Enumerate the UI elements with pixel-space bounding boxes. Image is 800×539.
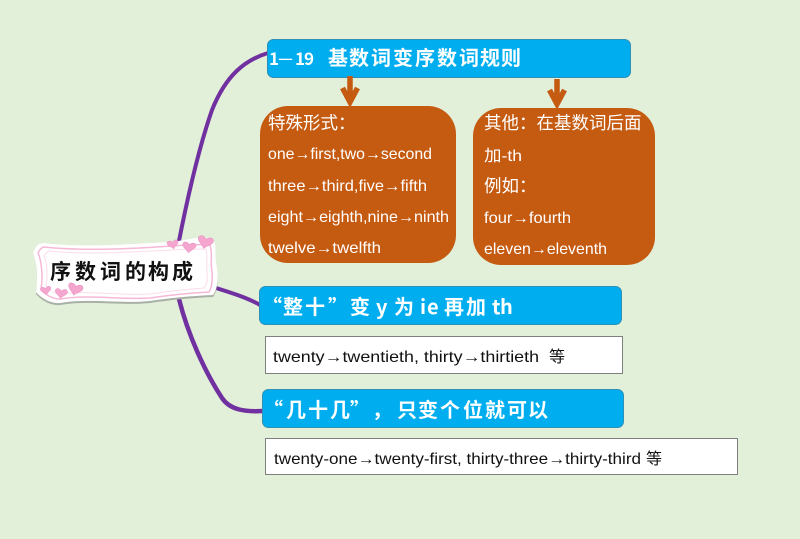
panel: other forms: 其他：在基数词后面 — [484, 110, 642, 135]
text box: compound examples — [266, 438, 738, 474]
heading: tens rule — [260, 286, 622, 324]
icon: hearts — [40, 235, 214, 299]
connector: center to tens rule — [216, 288, 260, 305]
panel: special forms: one→first,two→second — [268, 146, 432, 163]
heading: 1-19 rule: 1 — [269, 45, 279, 70]
panel: special forms — [260, 106, 456, 263]
text box: tens examples: twenty→twentieth, thirty→thirtieth — [273, 349, 539, 366]
panel: special forms: twelve→twelfth — [268, 240, 381, 257]
arrow: to special forms — [342, 76, 358, 102]
panel: special forms: three→third,five→fifth — [268, 178, 427, 195]
text box: tens examples — [266, 336, 622, 374]
panel: special forms: eight→eighth,nine→ninth — [268, 209, 449, 226]
panel: other forms: four→fourth — [484, 210, 571, 227]
text box: tens examples: 等 — [549, 348, 565, 366]
panel: other forms: 加-th — [484, 147, 522, 165]
heading: 1-19 rule: 1 — [295, 45, 305, 70]
panel: other forms — [473, 108, 655, 265]
heading: tens rule: “整十”变y为ie再加th — [262, 291, 513, 320]
text box: compound examples: 等 — [646, 450, 662, 468]
panel: other forms: 例如： — [484, 173, 536, 198]
title badge — [33, 235, 218, 305]
heading: 1-19 rule: 9 — [304, 45, 314, 70]
panel: other forms: eleven→eleventh — [484, 241, 607, 258]
heading: 1-19 rule: 基数词变序数词规则 — [328, 42, 521, 71]
arrow: to other forms — [550, 79, 564, 104]
panel: special forms: 特殊形式： — [268, 110, 356, 135]
connector: center to rule 1-19 — [178, 53, 268, 246]
heading: compound rule: “几十几”，只变个位就可以 — [263, 394, 548, 423]
text box: compound examples: twenty-one→twenty-first, thirty-three→thirty-third — [274, 451, 641, 468]
heading: 1-19 rule: — — [278, 49, 293, 70]
heading: 1-19 rule — [268, 40, 630, 78]
title text: 序数词的构成 — [50, 256, 193, 286]
connector: center to compound rule — [179, 299, 263, 411]
heading: compound rule — [262, 390, 624, 428]
